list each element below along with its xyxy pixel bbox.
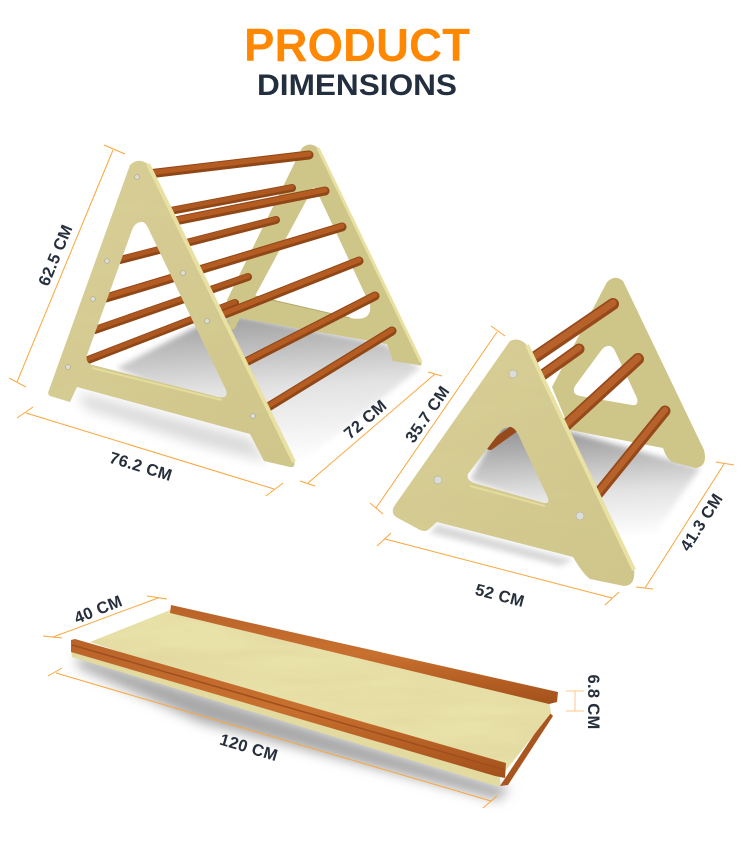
dimension: 41.3 cm: 41.3 CM (677, 491, 727, 555)
back frame (227, 144, 422, 365)
floor shadow (430, 425, 700, 566)
rod 3 (552, 358, 638, 438)
rod front 2 (170, 190, 325, 222)
ramp board (71, 605, 560, 800)
lower ply edge (71, 650, 500, 787)
dimension: 62.5 cm: 62.5 CM (35, 222, 77, 289)
dimension: 72 cm: 72 CM (341, 397, 391, 443)
front frame (385, 335, 640, 590)
rods (88, 154, 392, 412)
rods (490, 303, 665, 506)
title (244, 19, 470, 102)
front rail (71, 639, 506, 778)
dimension: 52 cm: 52 CM (473, 581, 526, 611)
floor shadow (78, 316, 420, 470)
rod back 3 (95, 276, 248, 330)
dimension: 35.7 cm: 35.7 CM (402, 383, 453, 446)
dimension: 76.2 cm (17, 407, 283, 496)
small triangle climber (385, 278, 705, 590)
rod back 1 (165, 187, 292, 212)
rod 1 (525, 303, 613, 364)
dimension: 120 cm (48, 668, 497, 808)
dimension: 72 cm (300, 372, 442, 486)
front frame (48, 160, 296, 468)
rod back 4 (88, 302, 235, 360)
back frame (552, 278, 705, 468)
rod front 4 (215, 260, 359, 318)
right underside rail (500, 712, 553, 786)
ramp surface (90, 610, 551, 778)
dimension: 62.5 cm (9, 145, 125, 387)
heading: dimensions: DIMENSIONS (257, 69, 457, 102)
ramp wood grain (85, 605, 560, 785)
dimension: 41.3 cm (636, 462, 734, 589)
dimension: 120 cm: 120 CM (218, 731, 280, 765)
rod front 6 (260, 330, 392, 412)
dimension: 40 cm: 40 CM (72, 592, 125, 628)
rod 4 (588, 410, 665, 506)
bolts (434, 370, 584, 520)
rod front 5 (238, 295, 375, 366)
rod front 3 (106, 226, 342, 298)
back rail (170, 605, 558, 704)
bolts (66, 175, 255, 418)
dimension: 6.8 cm (566, 675, 602, 729)
large triangle climber (40, 144, 422, 475)
dimension: 40 cm (43, 592, 167, 638)
dimension: 76.2 cm: 76.2 CM (107, 449, 174, 485)
ramp shadow (75, 655, 510, 800)
dimension: 35.7 cm (370, 326, 505, 514)
rod back 2 (120, 219, 276, 260)
dimension: 6.8 cm: 6.8 CM (584, 675, 602, 729)
rod 2 (530, 348, 579, 384)
rod front 1 (148, 154, 309, 174)
dimension: 52 cm (377, 533, 619, 611)
heading: product: PRODUCT (244, 19, 470, 71)
rod hidden piece in hole (490, 423, 522, 446)
